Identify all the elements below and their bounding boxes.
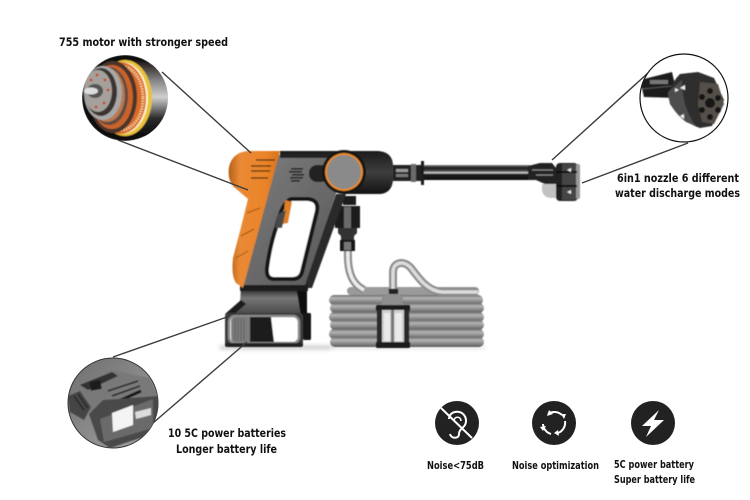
hose coil xyxy=(329,250,484,347)
label: 5C battery xyxy=(614,458,695,486)
trigger xyxy=(283,200,292,224)
battery pack xyxy=(225,300,311,347)
spray wand xyxy=(392,161,580,201)
caption: motor: 755 motor with stronger speed xyxy=(59,35,228,49)
handle opening xyxy=(267,199,317,279)
orange grip xyxy=(229,151,280,288)
hose connector xyxy=(335,196,360,251)
black top shell xyxy=(280,151,393,194)
dial xyxy=(322,150,366,194)
icon: noise crossed ear xyxy=(435,401,479,445)
label: noise optimization: Noise optimization xyxy=(512,459,599,472)
label: 5C battery: Super battery life xyxy=(614,473,695,486)
zoom circle: motor xyxy=(82,55,169,141)
shadow under product xyxy=(220,346,486,349)
battery mount base xyxy=(226,288,306,316)
motor vent dots xyxy=(289,168,304,182)
pressure washer gun xyxy=(225,150,393,347)
zoom circle: battery xyxy=(68,358,158,448)
icon: lightning bolt xyxy=(631,401,675,445)
callout lines: battery xyxy=(113,317,247,423)
caption: batteries: 10 5C power batteries xyxy=(168,426,286,440)
label: 5C battery: 5C power battery xyxy=(614,458,694,471)
zoom circle: nozzle xyxy=(640,54,728,142)
caption: nozzle xyxy=(615,171,740,200)
label: noise level: Noise<75dB xyxy=(427,459,484,472)
grey body panel xyxy=(240,155,350,287)
caption: batteries xyxy=(168,426,286,456)
icon: noise optimization arrows xyxy=(532,401,576,445)
caption: batteries: Longer battery life xyxy=(176,442,277,456)
callout lines: motor xyxy=(118,72,251,190)
callout lines: nozzle xyxy=(552,73,688,183)
water filter xyxy=(376,289,410,348)
